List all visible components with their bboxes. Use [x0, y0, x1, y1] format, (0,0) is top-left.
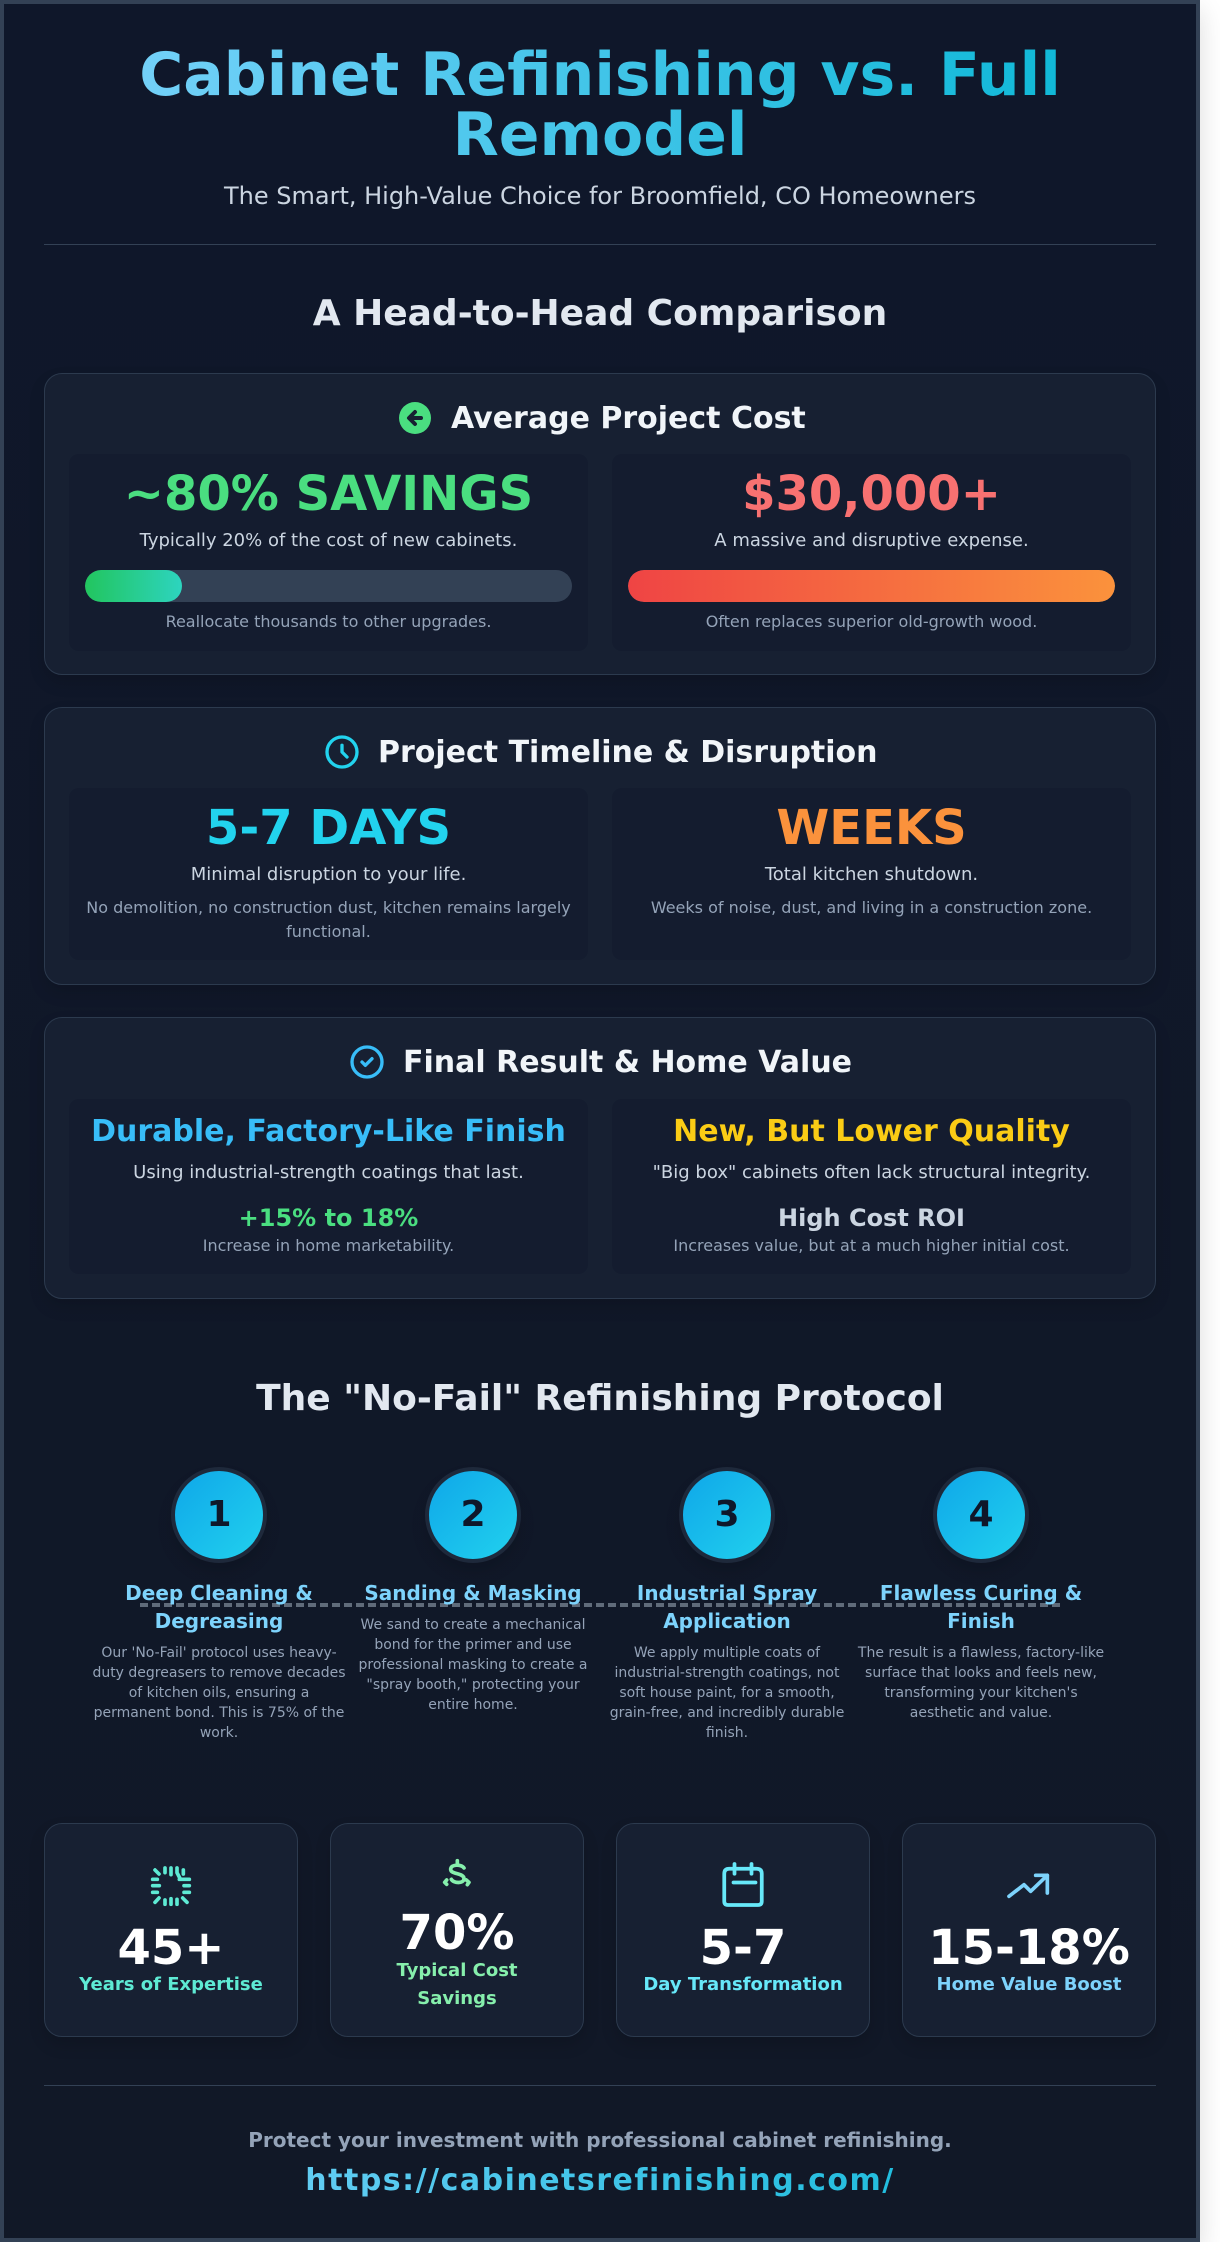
stat card: expertise [44, 1823, 298, 2037]
step title 1: Degreasing [155, 1609, 283, 1633]
finish description: Using industrial-strength coatings that last. [133, 1162, 524, 1183]
days note: functional. [286, 922, 371, 941]
step description 4 [858, 1645, 1104, 1721]
step description 2: entire home. [428, 1697, 518, 1713]
icon: arrow circle left [399, 402, 431, 434]
refinishing timeline column [69, 788, 588, 960]
panel: project timeline [44, 707, 1156, 985]
remodel cost column [612, 454, 1131, 651]
title: Cabinet Refinishing vs. Full [139, 40, 1061, 110]
step description 2: bond for the primer and use [374, 1637, 572, 1653]
ROI note: Increases value, but at a much higher initial cost. [673, 1236, 1070, 1255]
savings note: Reallocate thousands to other upgrades. [166, 612, 491, 631]
refinishing cost column [69, 454, 588, 651]
panel: final result [44, 1017, 1156, 1299]
title: Remodel [453, 100, 747, 170]
footer url [44, 2163, 1156, 2199]
step 3 [610, 1467, 844, 1741]
step number 2: 2 [460, 1494, 486, 1535]
remodel timeline column [612, 788, 1131, 960]
days note: No demolition, no construction dust, kitchen remains largely [86, 898, 571, 917]
step title 4: Flawless Curing & [880, 1581, 1082, 1605]
icon: trend up [1007, 1873, 1050, 1898]
step description 4: The result is a flawless, factory-like [858, 1645, 1104, 1661]
stat card: transformation [616, 1823, 870, 2037]
footer [44, 2085, 1156, 2216]
card heading: cost [399, 401, 806, 436]
step title 1: Deep Cleaning & [125, 1581, 313, 1605]
subtitle: The Smart, High-Value Choice for Broomfield, CO Homeowners [224, 182, 976, 210]
days note [86, 898, 571, 941]
footer url: https://cabinetsrefinishing.com/ [305, 2163, 895, 2198]
remodel note: Often replaces superior old-growth wood. [706, 612, 1037, 631]
panel: average project cost [44, 373, 1156, 675]
step title 2: Sanding & Masking [364, 1581, 582, 1605]
step description 1: Our 'No-Fail' protocol uses heavy- [101, 1645, 337, 1661]
stat label: transformation: Day Transformation [643, 1974, 843, 1995]
step number 4: 4 [968, 1494, 994, 1535]
value increase note: Increase in home marketability. [203, 1236, 454, 1255]
title [44, 45, 1156, 165]
heading: protocol: The "No-Fail" Refinishing Protocol [256, 1378, 944, 1419]
icon: dollar [442, 1858, 471, 1887]
stat card: savings [330, 1823, 584, 2037]
stat value: 70%: 70% [400, 1905, 514, 1961]
step number 1 [171, 1467, 267, 1563]
days description: Minimal disruption to your life. [191, 864, 466, 885]
remodel figure: $30,000+ [742, 466, 1001, 522]
refinishing result column [69, 1099, 588, 1274]
card heading: timeline [325, 735, 878, 770]
step description 2: professional masking to create a [358, 1657, 587, 1673]
step title 4 [880, 1581, 1082, 1633]
footer tagline: Protect your investment with professional cabinet refinishing. [248, 2128, 952, 2152]
step description 2 [358, 1617, 587, 1713]
heading text: result: Final Result & Home Value [403, 1045, 852, 1080]
quality description: "Big box" cabinets often lack structural integrity. [653, 1162, 1090, 1183]
value increase figure: +15% to 18% [239, 1204, 418, 1232]
step title 3 [637, 1581, 817, 1633]
step description 3 [610, 1645, 844, 1741]
step description 3: grain-free, and incredibly durable [610, 1705, 844, 1721]
stat value: 5-7: 5-7 [700, 1920, 786, 1976]
weeks description: Total kitchen shutdown. [765, 864, 978, 885]
step description 1: work. [200, 1725, 238, 1741]
step number 3 [679, 1467, 775, 1563]
step description 4: transforming your kitchen's [884, 1685, 1078, 1701]
remodel progress bar [628, 570, 1115, 602]
step description 3: soft house paint, for a smooth, [619, 1685, 835, 1701]
savings description: Typically 20% of the cost of new cabinets. [140, 530, 517, 551]
icon: check circle [350, 1045, 384, 1079]
weeks note: Weeks of noise, dust, and living in a construction zone. [651, 898, 1092, 917]
stat label: savings: Savings [417, 1988, 497, 2009]
heading text: timeline: Project Timeline & Disruption [378, 735, 878, 770]
stat value: 45+: 45+ [117, 1920, 224, 1976]
step description 4: aesthetic and value. [910, 1705, 1052, 1721]
step title 3: Industrial Spray [637, 1581, 817, 1605]
step number 3: 3 [714, 1494, 740, 1535]
step title 3: Application [663, 1609, 791, 1633]
step number 4 [933, 1467, 1029, 1563]
icon: clock [325, 735, 359, 769]
step 2 [358, 1467, 587, 1713]
stat card: home value [902, 1823, 1156, 2037]
step 1 [92, 1467, 346, 1741]
savings figure: ~80% SAVINGS [124, 466, 533, 522]
step number 1: 1 [206, 1494, 232, 1535]
icon: calendar [722, 1862, 764, 1907]
step description 3: industrial-strength coatings, not [614, 1665, 840, 1681]
dashed connector line [140, 1603, 1060, 1607]
step title 1 [125, 1581, 313, 1633]
step description 3: We apply multiple coats of [634, 1645, 820, 1661]
step description 3: finish. [706, 1725, 748, 1741]
step description 2: We sand to create a mechanical [361, 1617, 585, 1633]
icon: sun ticks [150, 1866, 192, 1906]
step description 4: surface that looks and feels new, [865, 1665, 1097, 1681]
stat label: savings [396, 1960, 518, 2009]
remodel description: A massive and disruptive expense. [714, 530, 1029, 551]
stat label: expertise: Years of Expertise [79, 1974, 263, 1995]
remodel result column [612, 1099, 1131, 1274]
stat value: 15-18%: 15-18% [928, 1920, 1130, 1976]
step title 4: Finish [947, 1609, 1015, 1633]
savings progress bar [85, 570, 572, 602]
step description 1: permanent bond. This is 75% of the [94, 1705, 344, 1721]
ROI figure: High Cost ROI [778, 1204, 965, 1232]
stat label: home value: Home Value Boost [936, 1974, 1121, 1995]
step description 1: of kitchen oils, ensuring a [129, 1685, 309, 1701]
weeks figure: WEEKS [776, 800, 967, 856]
days figure: 5-7 DAYS [206, 800, 451, 856]
step description 1: duty degreasers to remove decades [92, 1665, 346, 1681]
durable finish heading: Durable, Factory-Like Finish [91, 1114, 566, 1149]
heading: comparison: A Head-to-Head Comparison [313, 293, 887, 334]
card heading: result [350, 1045, 852, 1080]
step description 2: "spray booth," protecting your [366, 1677, 580, 1693]
step 4 [858, 1467, 1104, 1721]
step description 1 [92, 1645, 346, 1741]
step number 2 [425, 1467, 521, 1563]
stat label: savings: Typical Cost [396, 1960, 518, 1981]
header [44, 30, 1156, 245]
heading text: cost: Average Project Cost [451, 401, 806, 436]
lower quality heading: New, But Lower Quality [673, 1114, 1070, 1149]
